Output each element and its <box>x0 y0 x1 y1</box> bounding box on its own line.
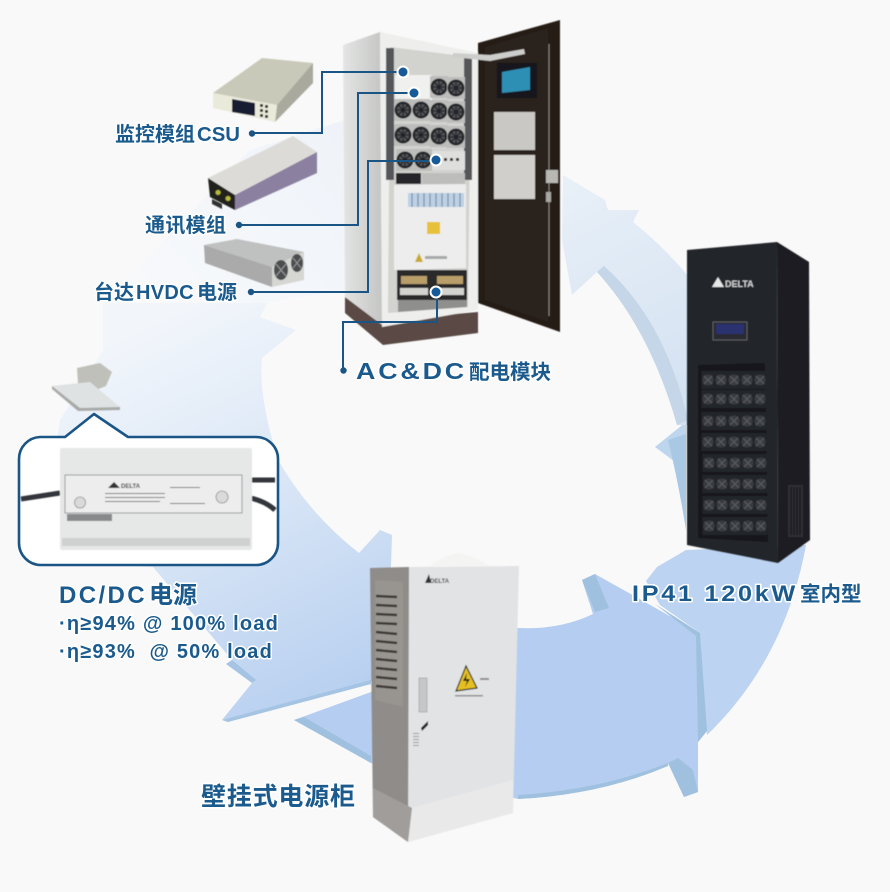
rectifier fan right <box>291 254 303 272</box>
communication module <box>432 151 465 170</box>
product: LED lamp <box>52 363 120 411</box>
lamp rim <box>52 386 120 411</box>
device front <box>213 93 277 122</box>
door screen <box>502 67 530 93</box>
heading: DC/DC power supply: DC/DC <box>59 582 147 609</box>
copper terminals <box>397 270 467 300</box>
lower control row <box>396 173 421 184</box>
label: IP41 indoor type <box>632 581 862 606</box>
connector: communication module <box>236 88 420 228</box>
door vent lower <box>494 155 535 199</box>
arrow: small head beside rack <box>655 422 686 470</box>
module clip <box>212 199 222 209</box>
cables <box>21 480 275 510</box>
rack logo <box>712 277 754 289</box>
label: Delta HVDC power supply: HVDC <box>136 282 196 304</box>
product: wall mounted power cabinet <box>370 553 519 842</box>
module front <box>208 178 235 210</box>
rack logo: DELTA <box>725 279 754 289</box>
heading: DC/DC power supply: 电源 <box>149 582 197 609</box>
device side <box>275 63 313 122</box>
rack front <box>687 242 778 563</box>
arrow: left descending <box>40 303 392 720</box>
label: communication module: 通讯模组 <box>145 214 226 237</box>
heading: DC/DC power supply <box>59 582 197 609</box>
spec: efficiency at half load: ·η≥93% @ 50% load <box>59 641 273 663</box>
product: communication module <box>208 136 317 210</box>
door closer arm <box>453 49 525 61</box>
monitor module <box>395 75 432 100</box>
arrow: top right light <box>562 175 690 425</box>
cabinet base <box>345 297 478 345</box>
handle <box>421 721 428 731</box>
delta logo on label <box>108 482 141 490</box>
warning text <box>455 678 489 696</box>
label: monitoring module CSU: 监控模组 <box>115 123 195 146</box>
louver panel <box>375 580 403 707</box>
circular arrows background <box>40 120 806 799</box>
label: monitoring module CSU <box>115 123 240 146</box>
latch <box>419 678 427 712</box>
side plinth <box>373 788 412 842</box>
arrow: faint upper left wedge <box>105 120 345 303</box>
breakers <box>408 193 464 207</box>
yellow warning label <box>427 222 440 234</box>
cabinet front frame <box>380 32 478 327</box>
device lower lip <box>62 538 250 546</box>
warning triangle <box>415 253 423 262</box>
label text bars <box>105 487 205 504</box>
label: AC and DC distribution module: 配电模块 <box>469 361 551 384</box>
arrow: shadow beside rack <box>668 434 686 530</box>
label: AC and DC distribution module <box>356 358 551 384</box>
fan modules <box>394 76 465 171</box>
lamp bracket <box>77 363 112 390</box>
rectifier fan left <box>274 260 288 280</box>
rectifier top <box>204 239 304 267</box>
open door <box>478 20 560 332</box>
arrow: right band <box>646 545 806 735</box>
rack display <box>713 322 747 340</box>
cabinet dome <box>430 553 490 566</box>
spec: efficiency at full load: ·η≥94% @ 100% load <box>59 613 279 635</box>
product: IP41 120kW indoor rack <box>687 242 810 563</box>
device body <box>60 448 252 550</box>
cabinet plinth <box>408 780 513 842</box>
interior lower panel <box>394 184 466 270</box>
connector: HVDC rectifier <box>248 154 442 295</box>
door vent upper <box>494 112 535 150</box>
module LEDs <box>216 190 231 201</box>
door inner frame <box>485 28 548 322</box>
panel: DC/DC module callout <box>19 414 278 565</box>
warning triangle <box>456 666 477 691</box>
arrow: top right shadow <box>597 266 688 425</box>
label: wall mounted power cabinet: 壁挂式电源柜 <box>201 783 355 811</box>
cabinet front <box>408 566 519 842</box>
rack module door <box>698 363 768 542</box>
module top <box>208 136 317 195</box>
label: Delta HVDC power supply: 电源 <box>197 281 237 304</box>
rack side <box>777 242 810 563</box>
door handle <box>546 170 558 183</box>
delta logo: DELTA <box>430 579 450 585</box>
rectifier face <box>272 252 304 287</box>
device buttons <box>260 104 268 118</box>
lamp panel <box>52 382 120 408</box>
door lock <box>546 192 551 202</box>
label: IP41 indoor type: IP41 120kW <box>632 581 798 606</box>
callout frame <box>19 414 278 565</box>
lower control row right <box>422 173 465 184</box>
indicator marks <box>413 733 419 746</box>
cabinet interior <box>388 47 471 313</box>
rectifier front <box>204 245 272 287</box>
rack vent <box>788 485 803 537</box>
device top <box>213 58 313 105</box>
label: monitoring module CSU: CSU <box>197 124 240 146</box>
module switches <box>444 158 459 161</box>
interior rail <box>386 48 472 180</box>
cabinet side <box>370 567 412 842</box>
label: IP41 indoor type: 室内型 <box>800 582 862 606</box>
device screen <box>232 99 255 116</box>
product: main HVDC cabinet <box>343 20 560 345</box>
device label <box>65 475 242 513</box>
rack module fans <box>702 371 768 535</box>
door strip <box>548 44 550 316</box>
delta logo on label: DELTA <box>121 484 141 490</box>
warning text strip <box>425 256 447 259</box>
DC/DC device <box>21 448 275 550</box>
barcode <box>67 514 112 521</box>
label dials <box>75 491 228 508</box>
label: AC and DC distribution module: AC&DC <box>356 358 467 384</box>
arrow: left head shadow <box>222 660 371 722</box>
connector: AC and DC distribution <box>340 286 442 374</box>
cabinet side <box>343 32 382 325</box>
label: Delta HVDC power supply: 台达 <box>94 280 134 304</box>
connector: monitoring module <box>249 66 408 137</box>
label: Delta HVDC power supply <box>94 280 237 304</box>
arrow: bottom <box>294 574 707 799</box>
arrow: bottom shadows <box>294 574 707 799</box>
cabinet lower void <box>398 300 467 312</box>
delta logo <box>425 574 450 585</box>
product: HVDC rectifier <box>204 239 304 287</box>
module side <box>235 152 317 210</box>
product: monitoring module CSU <box>213 58 313 122</box>
door screen bezel <box>497 63 537 98</box>
